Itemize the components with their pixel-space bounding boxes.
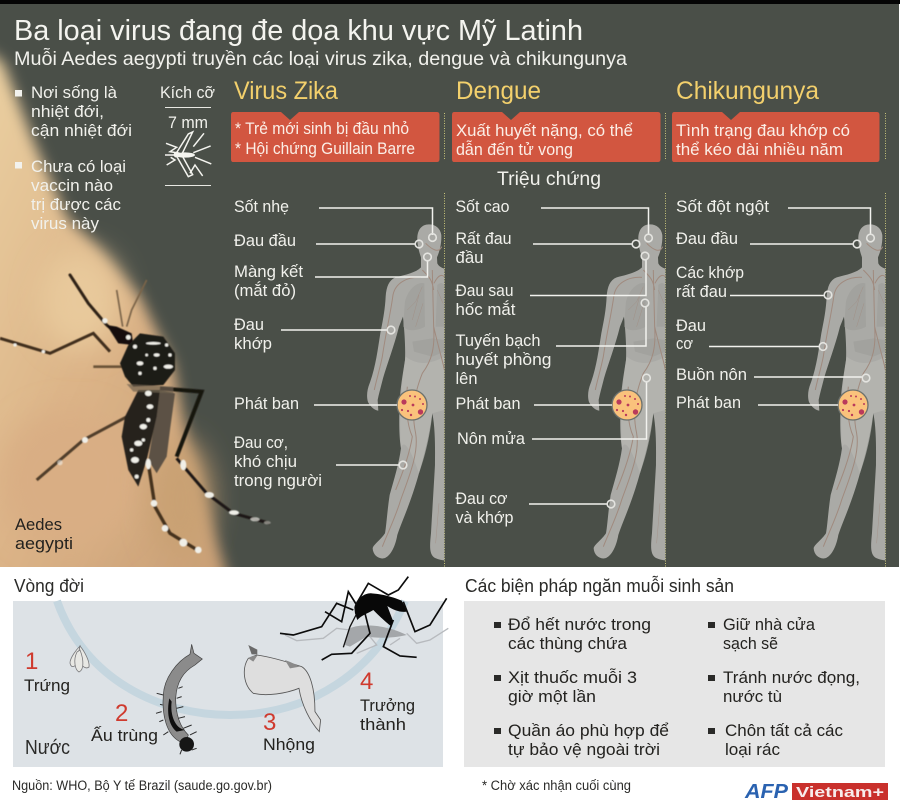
divider lines (444, 113, 886, 567)
symptoms: Dengue: Sốt cao (456, 197, 510, 216)
symptoms: Chikungunya: Phát ban (676, 393, 741, 412)
symptoms: Dengue: và khớp (456, 508, 514, 527)
callout: Zika complications: * Trẻ mới sinh bị đầu nhỏ (235, 120, 409, 138)
panel: prevention: tự bảo vệ ngoài trời (508, 740, 660, 759)
symptoms: Dengue: hốc mắt (456, 300, 516, 319)
dark header background (0, 0, 899, 567)
subtitle: Muỗi Aedes aegypti truyền các loại virus zika, dengue và chikungunya (14, 47, 627, 70)
stage 4: adult: thành (360, 715, 406, 734)
stage 1: eggs (24, 646, 89, 695)
stage 2: larva: Ấu trùng (91, 726, 158, 745)
icon: mosquito size (165, 132, 211, 177)
size scale (160, 83, 215, 186)
panel: prevention: giờ một lần (508, 687, 596, 706)
size scale: 7 mm (168, 113, 208, 132)
symptoms: Zika: Đau (234, 315, 264, 334)
callout: Dengue complications: dẫn đến tử vong (456, 140, 573, 159)
symptoms: Zika: Sốt nhẹ (234, 197, 289, 216)
footnote: * Chờ xác nhận cuối cùng (482, 778, 631, 793)
water arc (57, 601, 405, 715)
symptoms: Zika: (mắt đỏ) (234, 281, 296, 300)
symptoms: Chikungunya: Các khớp (676, 263, 744, 282)
symptoms: Chikungunya: cơ (676, 334, 693, 353)
callout: Chikungunya complications: Tình trạng đau khớp có (676, 122, 850, 140)
habitat notes: Chưa có loại (31, 157, 126, 176)
symptoms: Zika: Đau cơ, (234, 433, 288, 452)
stage 1: eggs: Trứng (24, 676, 70, 695)
panel: prevention: loại rác (725, 740, 780, 759)
symptoms: Chikungunya: Đau (676, 316, 706, 335)
habitat notes: vaccin nào (31, 176, 113, 195)
symptoms: Dengue: Đau sau (456, 281, 514, 300)
symptoms: Zika: Màng kết (234, 262, 303, 281)
stage 4: adult (280, 577, 448, 734)
size scale: Kích cỡ (160, 83, 215, 102)
title: Ba loại virus đang đe dọa khu vực Mỹ Latinh (14, 15, 583, 47)
panel: prevention: Tránh nước đọng, (723, 668, 860, 687)
symptoms: Zika: Đau đầu (234, 231, 296, 250)
heading: Chikungunya: Chikungunya (676, 77, 819, 105)
stage 3: pupa: Nhộng (263, 735, 315, 754)
symptoms: Dengue: đầu (456, 248, 484, 267)
source: Nguồn: WHO, Bộ Y tế Brazil (saude.go.gov.br) (12, 778, 272, 793)
callout: Chikungunya complications (672, 112, 880, 162)
body figure: Zika (367, 224, 449, 560)
panel: prevention: nước tù (723, 687, 782, 706)
heading: symptoms: Triệu chứng (497, 169, 601, 190)
mosquito drawing (280, 577, 448, 660)
symptoms: Dengue (456, 197, 652, 527)
panel: prevention (464, 601, 885, 767)
photo caption (15, 515, 73, 553)
stage 4: adult: 4 (360, 668, 373, 695)
heading: prevention: Các biện pháp ngăn muỗi sinh sản (465, 575, 734, 596)
stage 3: pupa (244, 645, 321, 754)
photo caption: aegypti (15, 534, 73, 553)
symptoms: Dengue: Đau cơ (456, 489, 508, 508)
habitat notes (15, 83, 132, 233)
stage 3: pupa: 3 (263, 709, 276, 736)
symptoms: Zika: trong người (234, 471, 322, 490)
stage 2: larva: 2 (115, 700, 128, 727)
photo caption: Aedes (15, 515, 62, 534)
symptoms: Zika (234, 197, 436, 490)
symptoms: Dengue: Phát ban (456, 394, 520, 413)
habitat notes: Nơi sống là (31, 83, 118, 102)
heading: Virus Zika: Virus Zika (234, 77, 338, 105)
callout: Dengue complications: Xuất huyết nặng, có thể (456, 122, 633, 140)
callout: Dengue complications (452, 112, 660, 162)
panel: prevention: Chôn tất cả các (725, 721, 843, 740)
stage 1: eggs: 1 (25, 648, 38, 675)
panel: prevention: Giữ nhà cửa (723, 615, 816, 634)
habitat notes: cận nhiệt đới (31, 121, 132, 140)
symptoms: Chikungunya: Đau đầu (676, 229, 738, 248)
stage 2: larva (91, 644, 202, 754)
top black strip (0, 0, 900, 4)
habitat notes: nhiệt đới, (31, 102, 104, 121)
callout: Zika complications: * Hội chứng Guillain Barre (235, 140, 415, 158)
panel: prevention: Quần áo phù hợp để (508, 721, 669, 740)
symptoms: Dengue: Tuyến bạch (456, 331, 540, 350)
body figure: Dengue (588, 224, 670, 560)
stage 4: adult: Trưởng (360, 696, 415, 715)
symptoms: Chikungunya: Sốt đột ngột (676, 197, 769, 216)
symptoms: Zika: khó chịu (234, 452, 297, 471)
symptoms: Dengue: Rất đau (456, 229, 512, 248)
symptoms: Zika: khớp (234, 334, 272, 353)
symptoms: Chikungunya: Buồn nôn (676, 365, 747, 384)
symptoms: Zika: Phát ban (234, 394, 299, 413)
panel: prevention: các thùng chứa (508, 634, 628, 653)
symptoms: Dengue: huyết phồng (456, 350, 552, 369)
symptoms: Dengue: lên (456, 369, 478, 388)
body figure: Chikungunya (808, 224, 890, 560)
logo: AFP Vietnam+: AFP (744, 781, 789, 803)
logo: AFP Vietnam+: Vietnam+ (796, 784, 884, 801)
habitat notes: virus này (31, 214, 99, 233)
heading: life cycle: Vòng đời (14, 576, 84, 596)
panel: prevention: Đổ hết nước trong (508, 615, 651, 634)
logo: AFP Vietnam+ (744, 781, 888, 803)
panel: life cycle (13, 577, 448, 767)
panel: prevention: Xịt thuốc muỗi 3 (508, 668, 637, 687)
callout: Chikungunya complications: thể kéo dài nhiều năm (676, 141, 843, 159)
symptoms: Chikungunya (676, 197, 874, 420)
panel: prevention: sạch sẽ (723, 634, 778, 653)
water label: Nước (25, 737, 70, 759)
symptoms: Dengue: Nôn mửa (457, 429, 526, 448)
symptoms: Chikungunya: rất đau (676, 282, 727, 301)
heading: Dengue: Dengue (456, 77, 541, 105)
callout: Zika complications (231, 112, 440, 162)
photo: mosquito on skin (0, 40, 271, 600)
habitat notes: trị được các (31, 195, 121, 214)
